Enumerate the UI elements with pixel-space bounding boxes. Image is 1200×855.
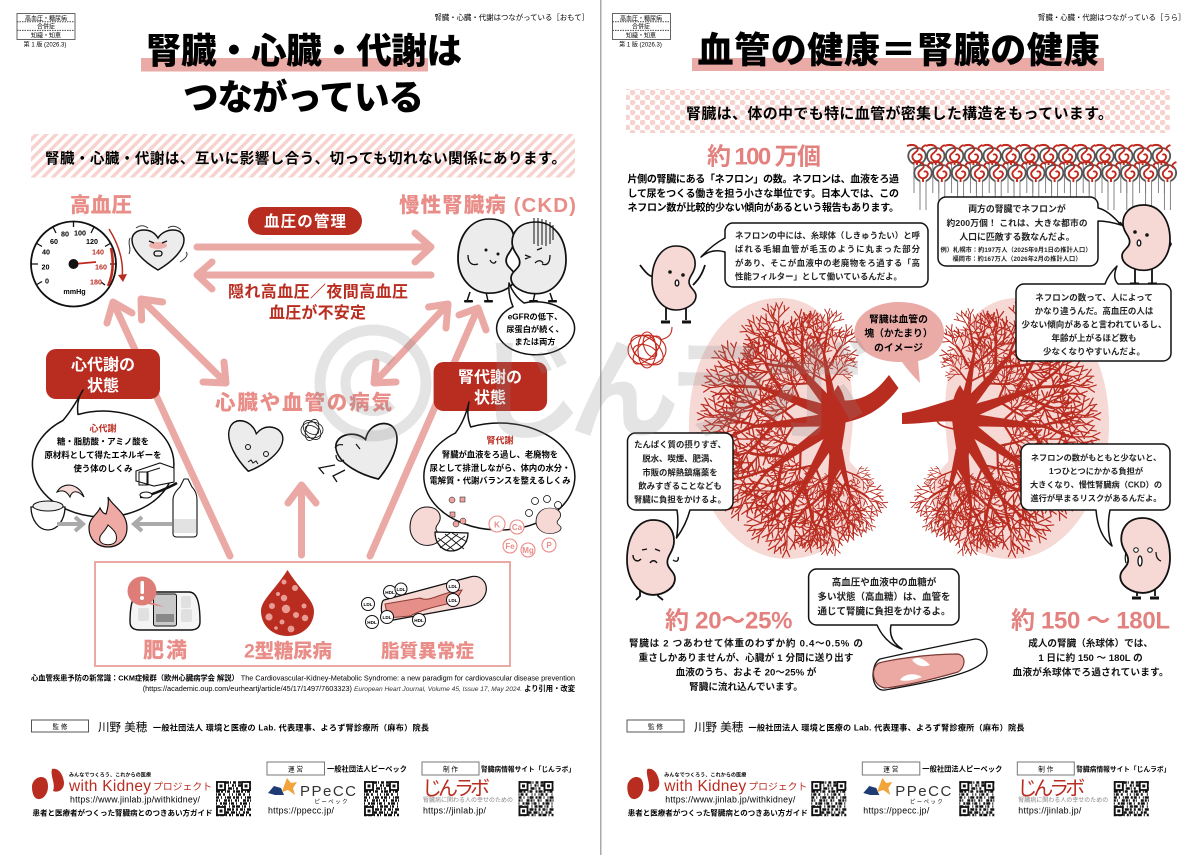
footer back: with Kidney project: みんなでつくろう、これからの医療 bbox=[664, 772, 746, 778]
label: hidden hypertension: 隠れ高血圧／夜間高血圧 bbox=[228, 282, 408, 301]
footer front: with Kidney project: https://www.jinlab.jp/withkidney/ bbox=[70, 794, 201, 804]
footer front: with Kidney project bbox=[32, 769, 251, 818]
callout: CKD bubble: eGFRの低下、 bbox=[508, 312, 562, 322]
icon: blood pressure gauge: 100 bbox=[74, 228, 86, 238]
header note back: 腎臓・心臓・代謝はつながっている［うら］ bbox=[1038, 13, 1186, 22]
text: filtered blood: 1 日に約 150 ～ 180L の bbox=[1038, 652, 1143, 664]
illustration: left kidney vessels bbox=[674, 267, 907, 590]
labels: risk factor names bbox=[143, 640, 474, 662]
callout: kidney metabolism: 尿として排泄しながら、体内の水分・ bbox=[430, 463, 570, 473]
icon: blood pressure gauge: 20 bbox=[42, 262, 50, 272]
panel: back page tag: 合併症 bbox=[632, 23, 650, 31]
icon: kidney filtering bbox=[410, 496, 562, 557]
callout: kidney burden causes: 腎臓に負担をかけるよ。 bbox=[634, 494, 726, 504]
footer front: JinLab: 腎臓病情報サイト「じんラボ」 bbox=[481, 764, 575, 774]
callout: kidney burden causes: 市販の解熱鎮痛薬を bbox=[642, 468, 718, 478]
character: kidney with two million bbox=[1120, 205, 1171, 284]
callout: CKD progression: ネフロンの数がもともと少ないと、 bbox=[1031, 452, 1161, 462]
callout: cardiac metabolism: 使う体のしくみ bbox=[74, 464, 133, 474]
callout: two million bbox=[938, 197, 1121, 266]
labels: risk factor names: 2型糖尿病 bbox=[244, 640, 332, 662]
footer back: JinLab: 制 作 bbox=[1038, 764, 1054, 774]
labels: risk factor names: 肥満 bbox=[143, 640, 187, 662]
citation bbox=[31, 674, 576, 693]
text: filtered blood: 血液が糸球体でろ過されています。 bbox=[1013, 666, 1169, 678]
icon: blood pressure gauge: 0 bbox=[45, 276, 49, 286]
callout: kidney metabolism bbox=[424, 402, 575, 530]
illustration: nephron rows bbox=[907, 145, 1176, 210]
text: nephron description bbox=[628, 172, 899, 214]
arrows: relationships bbox=[107, 233, 486, 556]
callout: cardiac metabolism: 心代謝 bbox=[89, 422, 117, 434]
banner front: 腎臓・心臓・代謝は、互いに影響し合う、切っても切れない関係にあります。 bbox=[45, 150, 566, 168]
callout: nephron counts vary: かなり違うんだ。高血圧の人は bbox=[1035, 306, 1154, 316]
icon: scale bbox=[128, 576, 200, 630]
label: hidden hypertension bbox=[228, 282, 408, 322]
footer back: JinLab: じんラボ bbox=[1017, 777, 1085, 800]
callout: kidney metabolism: 電解質・代謝バランスを整えるしくみ bbox=[430, 476, 570, 486]
text: blood flow share bbox=[629, 638, 863, 693]
icon: artery with cholesterol: HDL bbox=[385, 590, 395, 595]
text: nephron description: ネフロン数が比較的少ない傾向があるという報告もあります。 bbox=[628, 201, 899, 214]
watermark: じんラボ bbox=[474, 331, 869, 454]
header note front: 腎臓・心臓・代謝はつながっている［おもて］ bbox=[434, 13, 589, 22]
illustration: right kidney vessels bbox=[891, 267, 1124, 590]
footer front: PPeCC: 一般社団法人ピーペック bbox=[327, 764, 407, 774]
icon: blood pressure gauge: 140 bbox=[92, 248, 104, 256]
panel: cardiac metabolism: 状態 bbox=[87, 376, 119, 395]
callout: CKD bubble: または両方 bbox=[515, 336, 555, 346]
footer front: JinLab: 腎臓病に関わる人の幸せのための bbox=[423, 796, 513, 804]
icon: kidney filtering: Fe bbox=[505, 542, 515, 551]
callout: cardiac metabolism: 原材料として得たエネルギーを bbox=[44, 450, 162, 460]
footer front: JinLab bbox=[422, 762, 575, 816]
footer front: JinLab: https://jinlab.jp/ bbox=[423, 806, 487, 816]
heading: hypertension: 高血圧 bbox=[70, 193, 132, 217]
supervisor back: 一般社団法人 環境と医療の Lab. 代表理事、よろず腎診療所（麻布）院長 bbox=[748, 722, 1024, 732]
footer back: PPeCC: 一般社団法人ピーペック bbox=[922, 764, 1002, 774]
heading: CKD: 慢性腎臓病 (CKD) bbox=[399, 194, 576, 217]
icon: blood pressure gauge: 180 bbox=[90, 278, 102, 286]
panel: kidney metabolism: 腎代謝の bbox=[458, 368, 522, 386]
icon: artery with cholesterol: LDL bbox=[397, 587, 406, 592]
banner back: 腎臓は、体の中でも特に血管が密集した構造をもっています。 bbox=[686, 104, 1113, 122]
supervisor back: 川野 美穂 bbox=[694, 720, 744, 734]
icon: artery with cholesterol: HDL bbox=[367, 620, 377, 625]
supervisor front: 川野 美穂 bbox=[98, 720, 148, 734]
callout: cardiac metabolism: 糖・脂肪酸・アミノ酸を bbox=[57, 436, 149, 446]
text: blood flow share: 血液のうち、およそ 20～25% が bbox=[676, 666, 817, 678]
icon: blood pressure gauge: 80 bbox=[61, 230, 69, 238]
callout: vessel mass image: 塊（かたまり） bbox=[864, 326, 933, 340]
footer back: JinLab: https://jinlab.jp/ bbox=[1018, 806, 1082, 816]
stat: filtered litres: 約 150 ～ 180L bbox=[1011, 608, 1170, 634]
footer front: PPeCC: ピ ー ペ ッ ク bbox=[315, 798, 347, 806]
text: filtered blood bbox=[1013, 638, 1169, 678]
callout: two million: 両方の腎臓でネフロンが bbox=[968, 203, 1066, 214]
icon: artery with cholesterol: HDL bbox=[414, 618, 424, 623]
footer front: JinLab: じんラボ bbox=[422, 777, 490, 800]
callout: two million: 約200万個！ これは、大きな都市の bbox=[946, 217, 1088, 228]
icon: artery with cholesterol bbox=[362, 576, 486, 628]
callout: nephron filter bbox=[701, 223, 928, 287]
callout: nephron counts vary bbox=[1016, 266, 1171, 361]
callout: CKD progression: 1つひとつにかかる負担が bbox=[1049, 466, 1144, 476]
callout: CKD progression bbox=[1021, 444, 1170, 546]
pill: blood pressure management: 血圧の管理 bbox=[264, 212, 346, 230]
callout: nephron filter: ばれる毛細血管が毛玉のように丸まった部分 bbox=[735, 244, 921, 254]
footer back: PPeCC: 運 営 bbox=[883, 764, 899, 774]
title front: 腎臓・心臓・代謝は bbox=[146, 31, 462, 71]
callout: CKD progression: 大きくなり、慢性腎臓病（CKD）の bbox=[1030, 480, 1162, 490]
icon: blood drop bbox=[261, 570, 314, 636]
citation: 心血管疾患予防の新常識：CKM症候群（欧州心臓病学会 解説） The Cardiovascular-Kidney-Metabolic Syndrome: a new paradigm for cardiovascular disease prevention bbox=[31, 674, 575, 682]
heading: heart and vessel disease: 心臓や血管の病気 bbox=[215, 390, 392, 414]
icon: blood pressure gauge: 160 bbox=[95, 262, 107, 272]
panel: front page tag: 合併症 bbox=[37, 23, 55, 31]
footer front: PPeCC: PPeCC bbox=[300, 783, 356, 800]
icon: glomerulus tangle bbox=[625, 327, 672, 371]
callout: kidney burden causes: 脱水、喫煙、肥満、 bbox=[642, 454, 718, 464]
icon: kidney filtering: K bbox=[494, 520, 500, 530]
character: kidney talking about nephrons bbox=[640, 246, 705, 322]
icon: artery with cholesterol: LDL bbox=[364, 602, 373, 607]
supervisor front: 一般社団法人 環境と医療の Lab. 代表理事、よろず腎診療所（麻布）院長 bbox=[153, 722, 429, 732]
callout: kidney burden causes: 飲みすぎることなども bbox=[638, 481, 722, 491]
icon: artery with cholesterol: LDL bbox=[449, 584, 458, 589]
banner back bbox=[626, 89, 1170, 133]
icon: narrowed blood vessel bbox=[873, 639, 987, 690]
callout: CKD bubble bbox=[497, 283, 575, 355]
panel: back page tag: 第 1 版 (2026.3) bbox=[619, 40, 662, 48]
footer back: JinLab bbox=[1017, 762, 1170, 816]
callout: blood vessels burden: 高血圧や血液中の血糖が bbox=[832, 576, 937, 588]
panel: cardiac metabolism: 心代謝の bbox=[71, 356, 135, 374]
text: filtered blood: 成人の腎臓（糸球体）では、 bbox=[1028, 638, 1153, 650]
callout: nephron counts vary: ネフロンの数って、人によって bbox=[1035, 292, 1153, 302]
text: nephron description: して尿をつくる働きを担う小さな単位です。日本人では、この bbox=[628, 187, 899, 200]
callout: kidney metabolism: 腎代謝 bbox=[486, 434, 514, 446]
text: blood flow share: 重さしかありませんが、心臓が 1 分間に送り出す bbox=[638, 652, 854, 664]
panel: back page tag: 高血圧・糖尿病 bbox=[620, 14, 662, 22]
footer back: with Kidney project: with Kidney bbox=[663, 778, 747, 795]
callout: nephron filter: 性能フィルター」として働いているんだよ。 bbox=[735, 272, 902, 282]
icon: food and flame bbox=[31, 463, 197, 547]
icon: CKD kidneys bbox=[458, 218, 566, 302]
title front: つながっている bbox=[183, 78, 424, 118]
supervisor back bbox=[627, 720, 1024, 734]
footer front: JinLab: 制 作 bbox=[443, 764, 458, 774]
icon: blood pressure gauge: 120 bbox=[86, 237, 98, 246]
footer back: PPeCC bbox=[862, 762, 1002, 816]
footer back: PPeCC: ピ ー ペ ッ ク bbox=[910, 798, 943, 806]
panel: kidney metabolism: 状態 bbox=[474, 388, 506, 407]
character: worried kidney bbox=[627, 520, 678, 600]
callout: CKD bubble: 尿蛋白が続く、 bbox=[506, 324, 564, 334]
panel: back page tag: 知識・知恵 bbox=[626, 31, 656, 39]
pill: blood pressure management bbox=[248, 207, 362, 235]
footer back: with Kidney project: https://www.jinlab.jp/withkidney/ bbox=[665, 794, 796, 804]
callout: two million: 例）札幌市：約197万人（2025年9月1日の推計人口） bbox=[940, 246, 1092, 254]
icon: blood pressure gauge bbox=[31, 221, 127, 306]
panel: front page tag: 知識・知恵 bbox=[31, 31, 61, 39]
icon: angry heart bbox=[129, 226, 187, 270]
callout: nephron counts vary: 少なくなりやすいんだよ。 bbox=[1043, 346, 1145, 356]
footer front: PPeCC: 運 営 bbox=[288, 764, 303, 774]
callout: blood vessels burden bbox=[809, 569, 959, 649]
icon: kidney filtering: Ca bbox=[512, 523, 523, 532]
callout: nephron filter: があり、そこが血液中の老廃物をろ過する「高 bbox=[735, 258, 920, 268]
footer back: with Kidney project: プロジェクト bbox=[748, 781, 807, 793]
title front bbox=[141, 31, 462, 118]
callout: kidney metabolism: 腎臓が血液をろ過し、老廃物を bbox=[442, 450, 558, 460]
icon: artery with cholesterol: LDL bbox=[383, 615, 392, 620]
icon: blood pressure gauge: 60 bbox=[50, 237, 58, 246]
stat: 20 to 25 percent: 約 20～25% bbox=[665, 608, 792, 634]
callout: vessel mass image: 腎臓は血管の bbox=[869, 312, 928, 326]
footer back: PPeCC: PPeCC bbox=[895, 783, 951, 800]
footer front: with Kidney project: 患者と医療者がつくった腎臓病とのつきあい方ガイド bbox=[32, 808, 212, 818]
panel: kidney metabolism bbox=[434, 362, 547, 411]
panel: back page tag bbox=[612, 14, 670, 48]
footer front: PPeCC bbox=[267, 762, 407, 816]
footer back: JinLab: 腎臓病に関わる人の幸せのための bbox=[1018, 796, 1108, 804]
panel: front page tag: 第 1 版 (2026.3) bbox=[24, 40, 66, 48]
callout: two million: 福岡市：約167万人（2026年2月の推計人口） bbox=[952, 255, 1082, 263]
text: blood flow share: 腎臓に流れ込んでいます。 bbox=[689, 681, 803, 693]
panel: cardiac metabolism bbox=[46, 349, 160, 399]
callout: blood vessels burden: 多い状態（高血糖）は、血管を bbox=[817, 591, 951, 603]
callout: cardiac metabolism bbox=[32, 390, 174, 517]
panel: risk factors bbox=[95, 562, 510, 666]
callout: vessel mass image: のイメージ bbox=[874, 342, 923, 354]
callout: CKD progression: 進行が早まるリスクがあるんだよ。 bbox=[1030, 493, 1162, 503]
icon: blood pressure gauge: 40 bbox=[42, 248, 50, 256]
callout: vessel mass image bbox=[854, 302, 944, 383]
icon: kidney filtering: P bbox=[546, 541, 552, 550]
icon: kidney filtering: Mg bbox=[522, 546, 534, 555]
icon: tangled worry bbox=[300, 417, 324, 443]
icon: dizzy heart bbox=[222, 419, 285, 477]
callout: nephron filter: ネフロンの中には、糸球体（しきゅうたい）と呼 bbox=[735, 230, 921, 240]
footer front: PPeCC: https://ppecc.jp/ bbox=[268, 806, 335, 816]
callout: kidney burden causes bbox=[628, 433, 733, 538]
callout: kidney burden causes: たんぱく質の摂りすぎ、 bbox=[634, 440, 726, 450]
citation: (https://academic.oup.com/eurheartj/article/45/17/1497/7603323) European Heart Journal, Volume 45, Issue 17, May 2024. より引用・改変 bbox=[143, 684, 576, 693]
callout: blood vessels burden: 通じて腎臓に負担をかけるよ。 bbox=[817, 606, 951, 618]
footer front: with Kidney project: みんなでつくろう、これからの医療 bbox=[69, 772, 151, 778]
banner front bbox=[31, 134, 575, 178]
footer back: PPeCC: https://ppecc.jp/ bbox=[863, 806, 930, 816]
labels: risk factor names: 脂質異常症 bbox=[381, 640, 474, 662]
callout: two million: 人口に匹敵する数なんだよ。 bbox=[959, 231, 1075, 242]
icon: blood pressure gauge: mmHg bbox=[63, 287, 86, 296]
icon: artery with cholesterol: LDL bbox=[449, 598, 458, 603]
panel: front page tag: 高血圧・糖尿病 bbox=[25, 14, 67, 22]
supervisor front: 監 修 bbox=[52, 722, 68, 731]
footer back: with Kidney project bbox=[627, 769, 846, 818]
label: hidden hypertension: 血圧が不安定 bbox=[269, 303, 366, 322]
footer front: with Kidney project: プロジェクト bbox=[153, 781, 212, 793]
callout: nephron counts vary: 少ない傾向があると言われているし、 bbox=[1022, 320, 1166, 330]
footer back: JinLab: 腎臓病情報サイト「じんラボ」 bbox=[1076, 764, 1170, 774]
stat: one million nephrons: 約 100 万個 bbox=[707, 144, 821, 170]
panel: front page tag bbox=[17, 14, 75, 48]
title back: 血管の健康＝腎臓の健康 bbox=[698, 30, 1100, 70]
footer back: with Kidney project: 患者と医療者がつくった腎臓病とのつきあい方ガイド bbox=[628, 808, 808, 818]
character: surprised kidney bbox=[1120, 518, 1170, 598]
callout: nephron counts vary: 年齢が上がるほど数も bbox=[1051, 333, 1137, 343]
icon: sad heart bbox=[319, 420, 408, 489]
supervisor front bbox=[32, 720, 429, 734]
footer front: with Kidney project: with Kidney bbox=[68, 778, 151, 795]
text: nephron description: 片側の腎臓にある「ネフロン」の数。ネフロンは、血液をろ過 bbox=[628, 172, 899, 186]
text: blood flow share: 腎臓は 2 つあわせて体重のわずか約 0.4～0.5% の bbox=[629, 638, 863, 650]
supervisor back: 監 修 bbox=[648, 722, 663, 731]
